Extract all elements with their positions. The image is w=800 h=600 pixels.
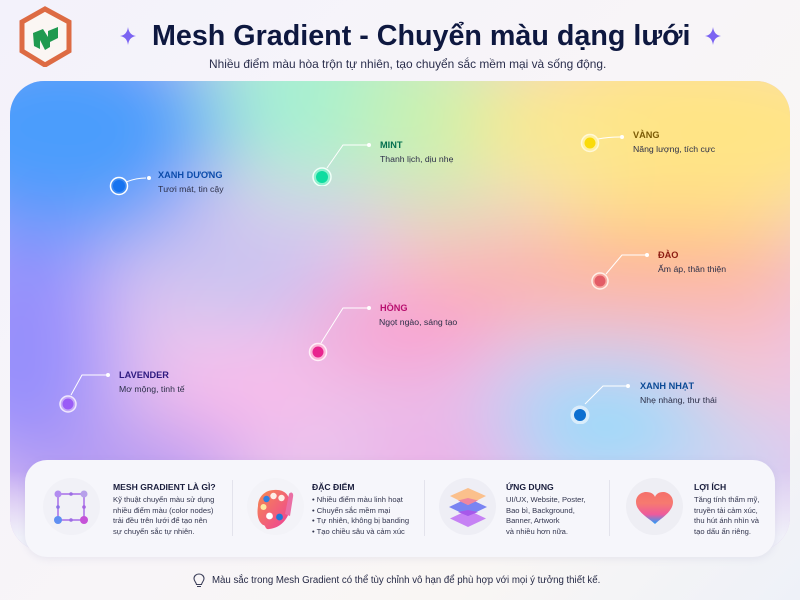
node: Đào: Ấm áp, thân thiện xyxy=(658,264,726,274)
node: Đào: ĐÀO xyxy=(658,250,678,260)
node: Xanh Nhạt: XANH NHẠT xyxy=(640,381,694,391)
node: Mint: Thanh lịch, dịu nhẹ xyxy=(380,154,453,164)
heading: MESH GRADIENT LÀ GÌ? xyxy=(113,482,216,492)
icon: light bulb xyxy=(193,574,204,587)
text: Kỹ thuật chuyển màu sử dụng xyxy=(113,495,214,504)
panel: mesh gradient xyxy=(10,81,790,551)
text xyxy=(113,495,214,536)
text: tạo dấu ấn riêng. xyxy=(694,527,751,536)
text: • Chuyển sắc mềm mại xyxy=(312,506,390,515)
panel: info card xyxy=(25,460,775,557)
section: Lợi ích xyxy=(636,482,759,536)
text: và nhiều hơn nữa. xyxy=(506,527,568,536)
node: Lavender: LAVENDER xyxy=(119,370,169,380)
footer note: Màu sắc trong Mesh Gradient có thể tùy chỉnh vô hạn để phù hợp với mọi ý tưởng thiết kế. xyxy=(212,575,600,586)
heading: LỢI ÍCH xyxy=(694,482,726,492)
text: trải đều trên lưới để tạo nên xyxy=(113,516,207,525)
node: Xanh Dương: XANH DƯƠNG xyxy=(158,170,222,180)
text: sự chuyển sắc tự nhiên. xyxy=(113,527,195,536)
icon: left sparkle xyxy=(120,27,136,45)
text: Tăng tính thẩm mỹ, xyxy=(694,495,759,504)
node: Hồng xyxy=(308,302,457,362)
text: UI/UX, Website, Poster, xyxy=(506,495,586,504)
heading: ỨNG DỤNG xyxy=(506,482,554,492)
text: Bao bì, Background, xyxy=(506,506,575,515)
icon: palette xyxy=(258,490,294,530)
node: Xanh Dương: Tươi mát, tin cậy xyxy=(158,184,224,194)
node: Mint: MINT xyxy=(380,140,402,150)
text: • Nhiều điểm màu linh hoạt xyxy=(312,495,403,504)
node: Lavender xyxy=(59,370,185,413)
node: Hồng: HỒNG xyxy=(380,303,408,313)
node: Lavender: Mơ mộng, tinh tế xyxy=(119,384,185,394)
text: thu hút ánh nhìn và xyxy=(694,516,759,525)
node: Mint xyxy=(312,140,454,186)
subtitle: Nhiều điểm màu hòa trộn tự nhiên, tạo chuyển sắc mềm mại và sống động. xyxy=(209,57,606,71)
text: truyền tải cảm xúc, xyxy=(694,506,758,515)
node: Xanh Nhạt xyxy=(570,381,717,424)
title: Mesh Gradient - Chuyển màu dạng lưới xyxy=(152,20,690,52)
node: Xanh Dương xyxy=(110,170,224,196)
icon: heart xyxy=(636,492,673,524)
heading: ĐẶC ĐIỂM xyxy=(312,482,354,492)
section: Ứng dụng xyxy=(449,482,586,536)
node: Vàng: VÀNG xyxy=(633,130,660,140)
section: Đặc điểm xyxy=(258,482,409,536)
text: nhiều điểm màu (color nodes) xyxy=(113,506,213,515)
logo xyxy=(20,6,72,67)
text: Banner, Artwork xyxy=(506,516,560,525)
text: • Tạo chiều sâu và cảm xúc xyxy=(312,527,405,536)
node: Hồng: Ngọt ngào, sáng tạo xyxy=(379,317,457,327)
icon: layers xyxy=(449,488,487,527)
icon: mesh grid xyxy=(54,490,88,524)
text xyxy=(506,495,586,536)
text xyxy=(312,495,409,536)
node: Xanh Nhạt: Nhẹ nhàng, thư thái xyxy=(640,395,717,405)
text xyxy=(694,495,759,536)
text: • Tự nhiên, không bị banding xyxy=(312,516,409,525)
node: Đào xyxy=(591,250,726,290)
node: Vàng: Năng lượng, tích cực xyxy=(633,144,715,154)
node: Vàng xyxy=(580,130,715,154)
icon: right sparkle xyxy=(705,27,721,45)
section: Mesh Gradient là gì xyxy=(54,482,216,536)
